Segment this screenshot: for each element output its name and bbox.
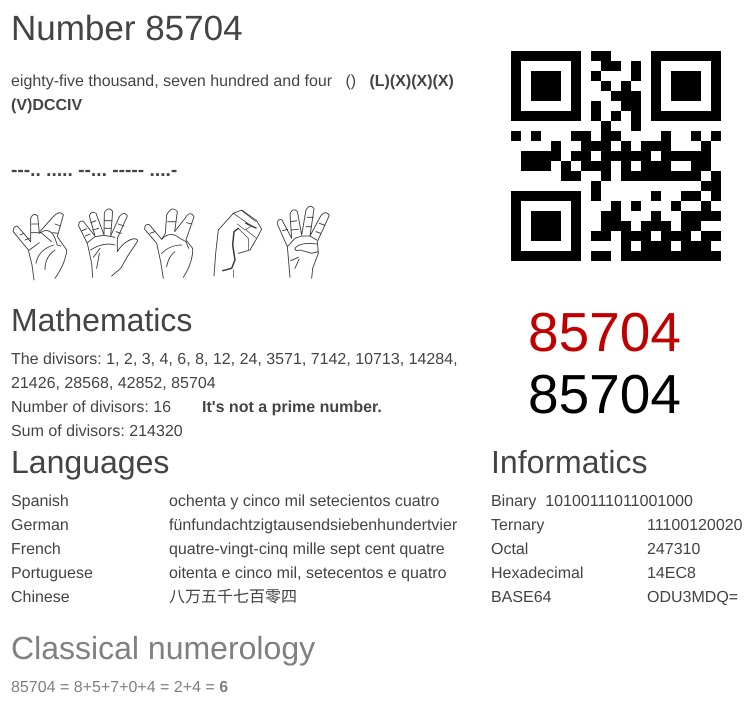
number of divisors and prime status: It's not a prime number. <box>202 399 382 416</box>
number of divisors and prime status: Number of divisors: 16 <box>11 399 171 416</box>
language row: Portuguese <box>11 565 446 582</box>
big red number: 85704 <box>528 301 681 363</box>
language row: Portuguese: oitenta e cinco mil, setecentos e quatro <box>169 565 446 582</box>
panel: languages <box>11 444 457 606</box>
panel: mathematics <box>11 302 458 440</box>
language row: Spanish <box>11 493 439 510</box>
heading: classical numerology: Classical numerology <box>11 630 315 666</box>
big black number: 85704 <box>528 363 681 425</box>
hand: digit 7 <box>145 209 194 278</box>
title: Number 85704 <box>11 9 243 48</box>
hand: digit 8 <box>13 213 67 280</box>
language row: German: German <box>11 517 69 534</box>
informatics row: hexadecimal: 14EC8 <box>647 565 696 582</box>
informatics row: ternary <box>491 517 743 534</box>
informatics row: base64: BASE64 <box>491 589 551 606</box>
sign language hands <box>12 206 330 280</box>
QR code <box>511 51 721 261</box>
informatics row: binary: Binary 10100111011001000 <box>491 493 693 510</box>
panel: classical numerology <box>11 630 315 696</box>
QR modules <box>511 51 721 261</box>
informatics row: hexadecimal <box>491 565 696 582</box>
heading: languages: Languages <box>11 444 169 480</box>
language row: French: French <box>11 541 61 558</box>
language row: Chinese: Chinese <box>11 589 70 606</box>
informatics row: octal: 247310 <box>647 541 700 558</box>
divisors list <box>11 351 458 392</box>
language row: Chinese <box>11 588 297 606</box>
numerology calculation: 85704 = 8+5+7+0+4 = 2+4 = 6 <box>11 679 228 696</box>
panel: informatics <box>491 444 743 606</box>
divisors list: The divisors: 1, 2, 3, 4, 6, 8, 12, 24, 3571, 7142, 10713, 14284, <box>11 351 458 368</box>
informatics row: octal: Octal <box>491 541 528 558</box>
language row: German: fünfundachtzigtausendsiebenhundertvier <box>169 517 457 534</box>
hand: digit 5 <box>79 209 138 277</box>
divisors list: 21426, 28568, 42852, 85704 <box>11 375 216 392</box>
language row: Spanish: ochenta y cinco mil setecientos cuatro <box>169 493 439 510</box>
language row: Spanish: Spanish <box>11 493 69 510</box>
language row: French <box>11 541 445 558</box>
informatics row: hexadecimal: Hexadecimal <box>491 565 583 582</box>
heading: mathematics: Mathematics <box>11 302 192 338</box>
language row: Chinese: 八万五千七百零四 <box>169 589 297 606</box>
language row: German <box>11 517 457 534</box>
informatics row: ternary: Ternary <box>491 517 544 534</box>
number name and roman numeral <box>11 73 454 114</box>
informatics row: ternary: 11100120020 <box>647 517 743 534</box>
number name and roman numeral: (V)DCCIV <box>11 97 82 114</box>
number of divisors and prime status <box>11 399 382 416</box>
hand: digit 4 <box>277 206 329 278</box>
morse code: ---.. ..... --... ----- ....- <box>11 160 177 181</box>
language row: Portuguese: Portuguese <box>11 565 93 582</box>
heading: informatics: Informatics <box>491 444 647 480</box>
hand: digit 0 <box>214 210 262 277</box>
sum of divisors: Sum of divisors: 214320 <box>11 423 183 440</box>
informatics row: base64: ODU3MDQ= <box>647 589 738 606</box>
number name and roman numeral: eighty-five thousand, seven hundred and four () (L)(X)(X)(X) <box>11 73 454 90</box>
language row: French: quatre-vingt-cinq mille sept cent quatre <box>169 541 445 558</box>
informatics row: octal <box>491 541 700 558</box>
informatics row: base64 <box>491 589 738 606</box>
